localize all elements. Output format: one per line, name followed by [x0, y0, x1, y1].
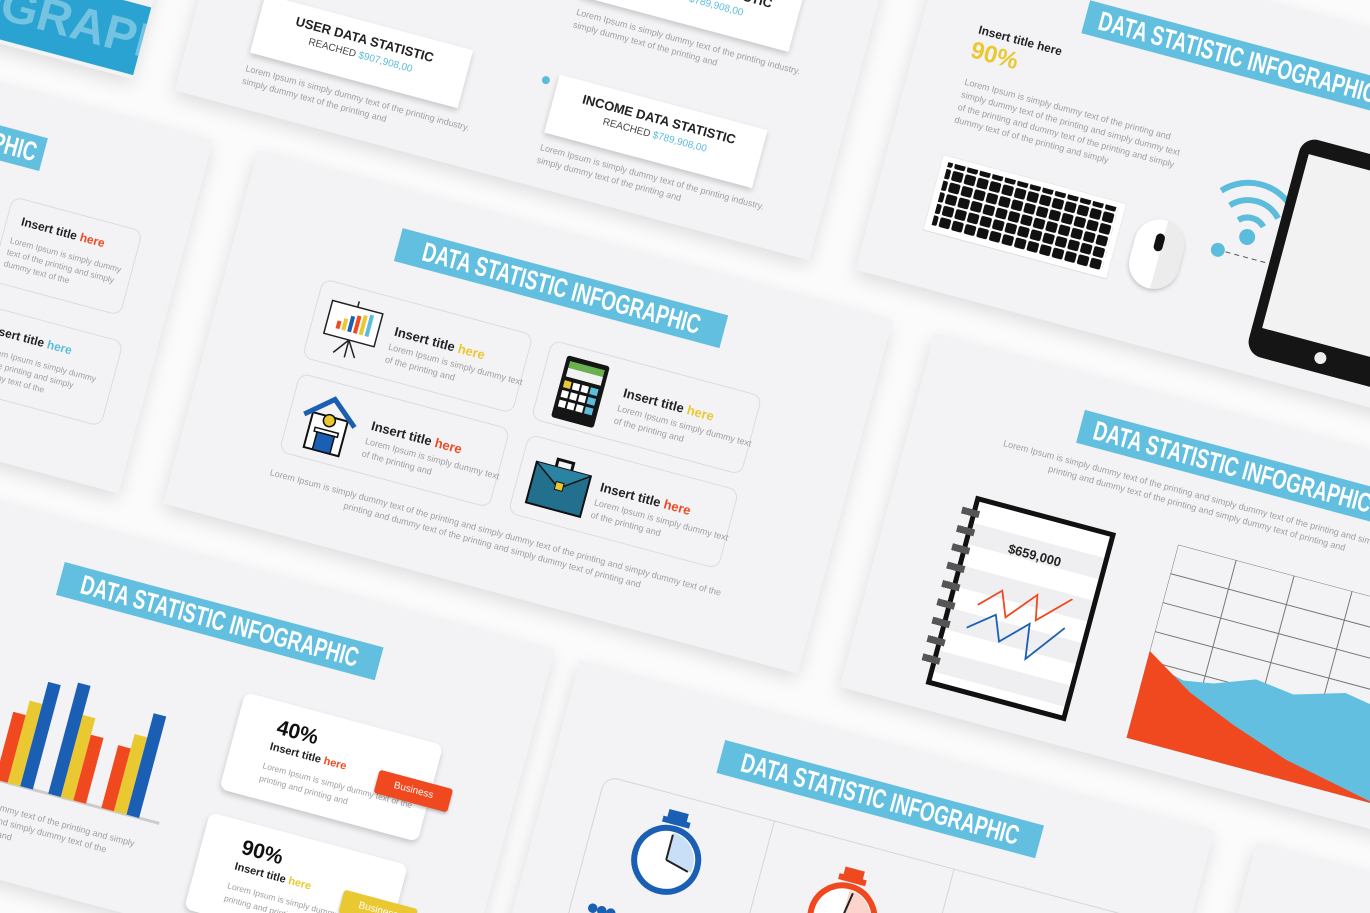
card: presentation: Insert title here [393, 324, 487, 362]
banner [1081, 0, 1370, 168]
slide: center icons [163, 150, 893, 674]
card: 40%: Lorem Ipsum is simply dummy text of the [262, 760, 413, 810]
icon: briefcase [524, 457, 592, 518]
card: briefcase: Insert title here [599, 479, 693, 518]
panel: columns [538, 775, 1146, 913]
card: presentation: of the printing and [384, 354, 456, 383]
card: income data statistic: INCOME DATA STATISTIC [581, 92, 737, 147]
button: business red [374, 770, 453, 812]
slide: bottom-left bar chart and cards [0, 480, 555, 913]
card: insert title red: Insert title here [20, 214, 106, 250]
percentage: 90% [968, 37, 1021, 75]
banner: DATA STATISTIC INFOGRAPHIC [1090, 415, 1370, 519]
card: house: Lorem Ipsum is simply dummy text [364, 436, 501, 481]
text: upper lorem: simply dummy text of the printing and [572, 19, 719, 68]
card: insert title red: dummy text of the [3, 258, 71, 285]
slide: top-right devices [855, 0, 1370, 440]
icon: blue stopwatch [631, 809, 702, 895]
card: 40%: Insert title here [268, 741, 348, 773]
banner [1076, 410, 1370, 577]
slide: bottom-middle stopwatches [485, 661, 1214, 913]
icon: notebook [926, 496, 1116, 721]
card: 90% [184, 812, 408, 913]
text: simply dummy text of the printing and simply dummy text [960, 89, 1181, 158]
card: 40%: printing and printing and [258, 773, 349, 806]
button: business red: Business [392, 780, 435, 801]
card: insert title red [0, 196, 143, 316]
card: presentation [302, 278, 534, 414]
card: briefcase: of the printing and [590, 510, 662, 538]
icon: tablet [1245, 136, 1370, 392]
icon: wifi [1210, 180, 1287, 264]
text: of the printing and dummy text of the printing and simply [957, 102, 1175, 169]
icon: spiral rings [919, 507, 980, 675]
card: 40%: 40% [274, 716, 321, 749]
card: calculator: Insert title here [622, 385, 716, 424]
card: house [279, 372, 510, 508]
icon: notebook: $659,000 [1007, 541, 1063, 570]
text: Lorem Ipsum is simply dummy text of the printing and [963, 77, 1172, 142]
banner: DATA STATISTIC INFOGRAPHIC [77, 570, 362, 673]
card: house: Insert title here [370, 418, 464, 457]
card: insert title red: Lorem Ipsum is simply dummy [9, 235, 122, 274]
card: 40% [219, 692, 443, 842]
heading: Insert title here [977, 23, 1064, 58]
card: user data statistic: USER DATA STATISTIC [294, 14, 435, 65]
card: presentation: Lorem Ipsum is simply dummy text [387, 342, 524, 387]
slide: top-middle statistics [175, 0, 904, 260]
card: insert title red: text of the printing and simply [6, 247, 115, 285]
icon: easel chart [322, 300, 384, 358]
text: lorem under user card: Lorem Ipsum is simply dummy text of the printing industry. [245, 63, 471, 133]
text: footer lorem: printing and dummy text of the printing and simply dummy text of printing and [343, 501, 642, 590]
banner: DATA STATISTIC INFOGRAPHIC [419, 237, 703, 340]
card: calculator: Lorem Ipsum is simply dummy text [616, 403, 753, 449]
card: calculator: of the printing and [613, 416, 685, 444]
slide: top-left (partial) [0, 0, 227, 79]
card: income data statistic [544, 75, 767, 188]
icon: mouse [1123, 214, 1190, 294]
text: footer lorem: Lorem Ipsum is simply dummy text of the printing and simply dummy text of the printing and simply dummy text of the [269, 467, 722, 598]
icon: house [302, 396, 356, 458]
button: business yellow [338, 890, 418, 913]
card: calculator [531, 340, 763, 475]
card: 90%: 90% [239, 836, 286, 869]
card: 90%: Insert title here [233, 861, 313, 893]
dot: blue [541, 75, 551, 85]
icon: red stopwatch [808, 866, 878, 913]
text: printing and dummy text of the printing and simply dummy text of printing and [1047, 464, 1347, 553]
slide: right-middle notebook and area chart [840, 333, 1370, 857]
card: insert title blue [0, 307, 124, 427]
card: upper right [581, 0, 804, 52]
card: house: of the printing and [361, 448, 433, 477]
banner: DATA STATISTIC INFOGRAPHIC [738, 748, 1023, 851]
slide: left (partial) [0, 0, 213, 494]
card: user data statistic: REACHED $907,908,00 [307, 37, 414, 75]
card: user data statistic [250, 0, 473, 108]
text: upper lorem: Lorem Ipsum is simply dummy text of the printing industry. [575, 7, 801, 76]
card: income data statistic: REACHED $789,908,00 [601, 116, 708, 155]
text: lorem under income card: simply dummy text of the printing and [536, 155, 682, 203]
icon: calculator [552, 356, 610, 428]
slide: bottom-right (partial) [1162, 842, 1370, 913]
chart: grouped bars [0, 682, 166, 825]
text: lorem under income card: Lorem Ipsum is simply dummy text of the printing industry. [539, 142, 765, 212]
text: lorem under user card: simply dummy text of the printing and [241, 76, 388, 124]
icon: keyboard [923, 154, 1126, 280]
text: dummy text of of the printing and simply [953, 114, 1110, 165]
card: briefcase: Lorem Ipsum is simply dummy text [593, 497, 729, 543]
card: briefcase [508, 434, 739, 569]
chart: area chart with grid [1126, 544, 1370, 803]
